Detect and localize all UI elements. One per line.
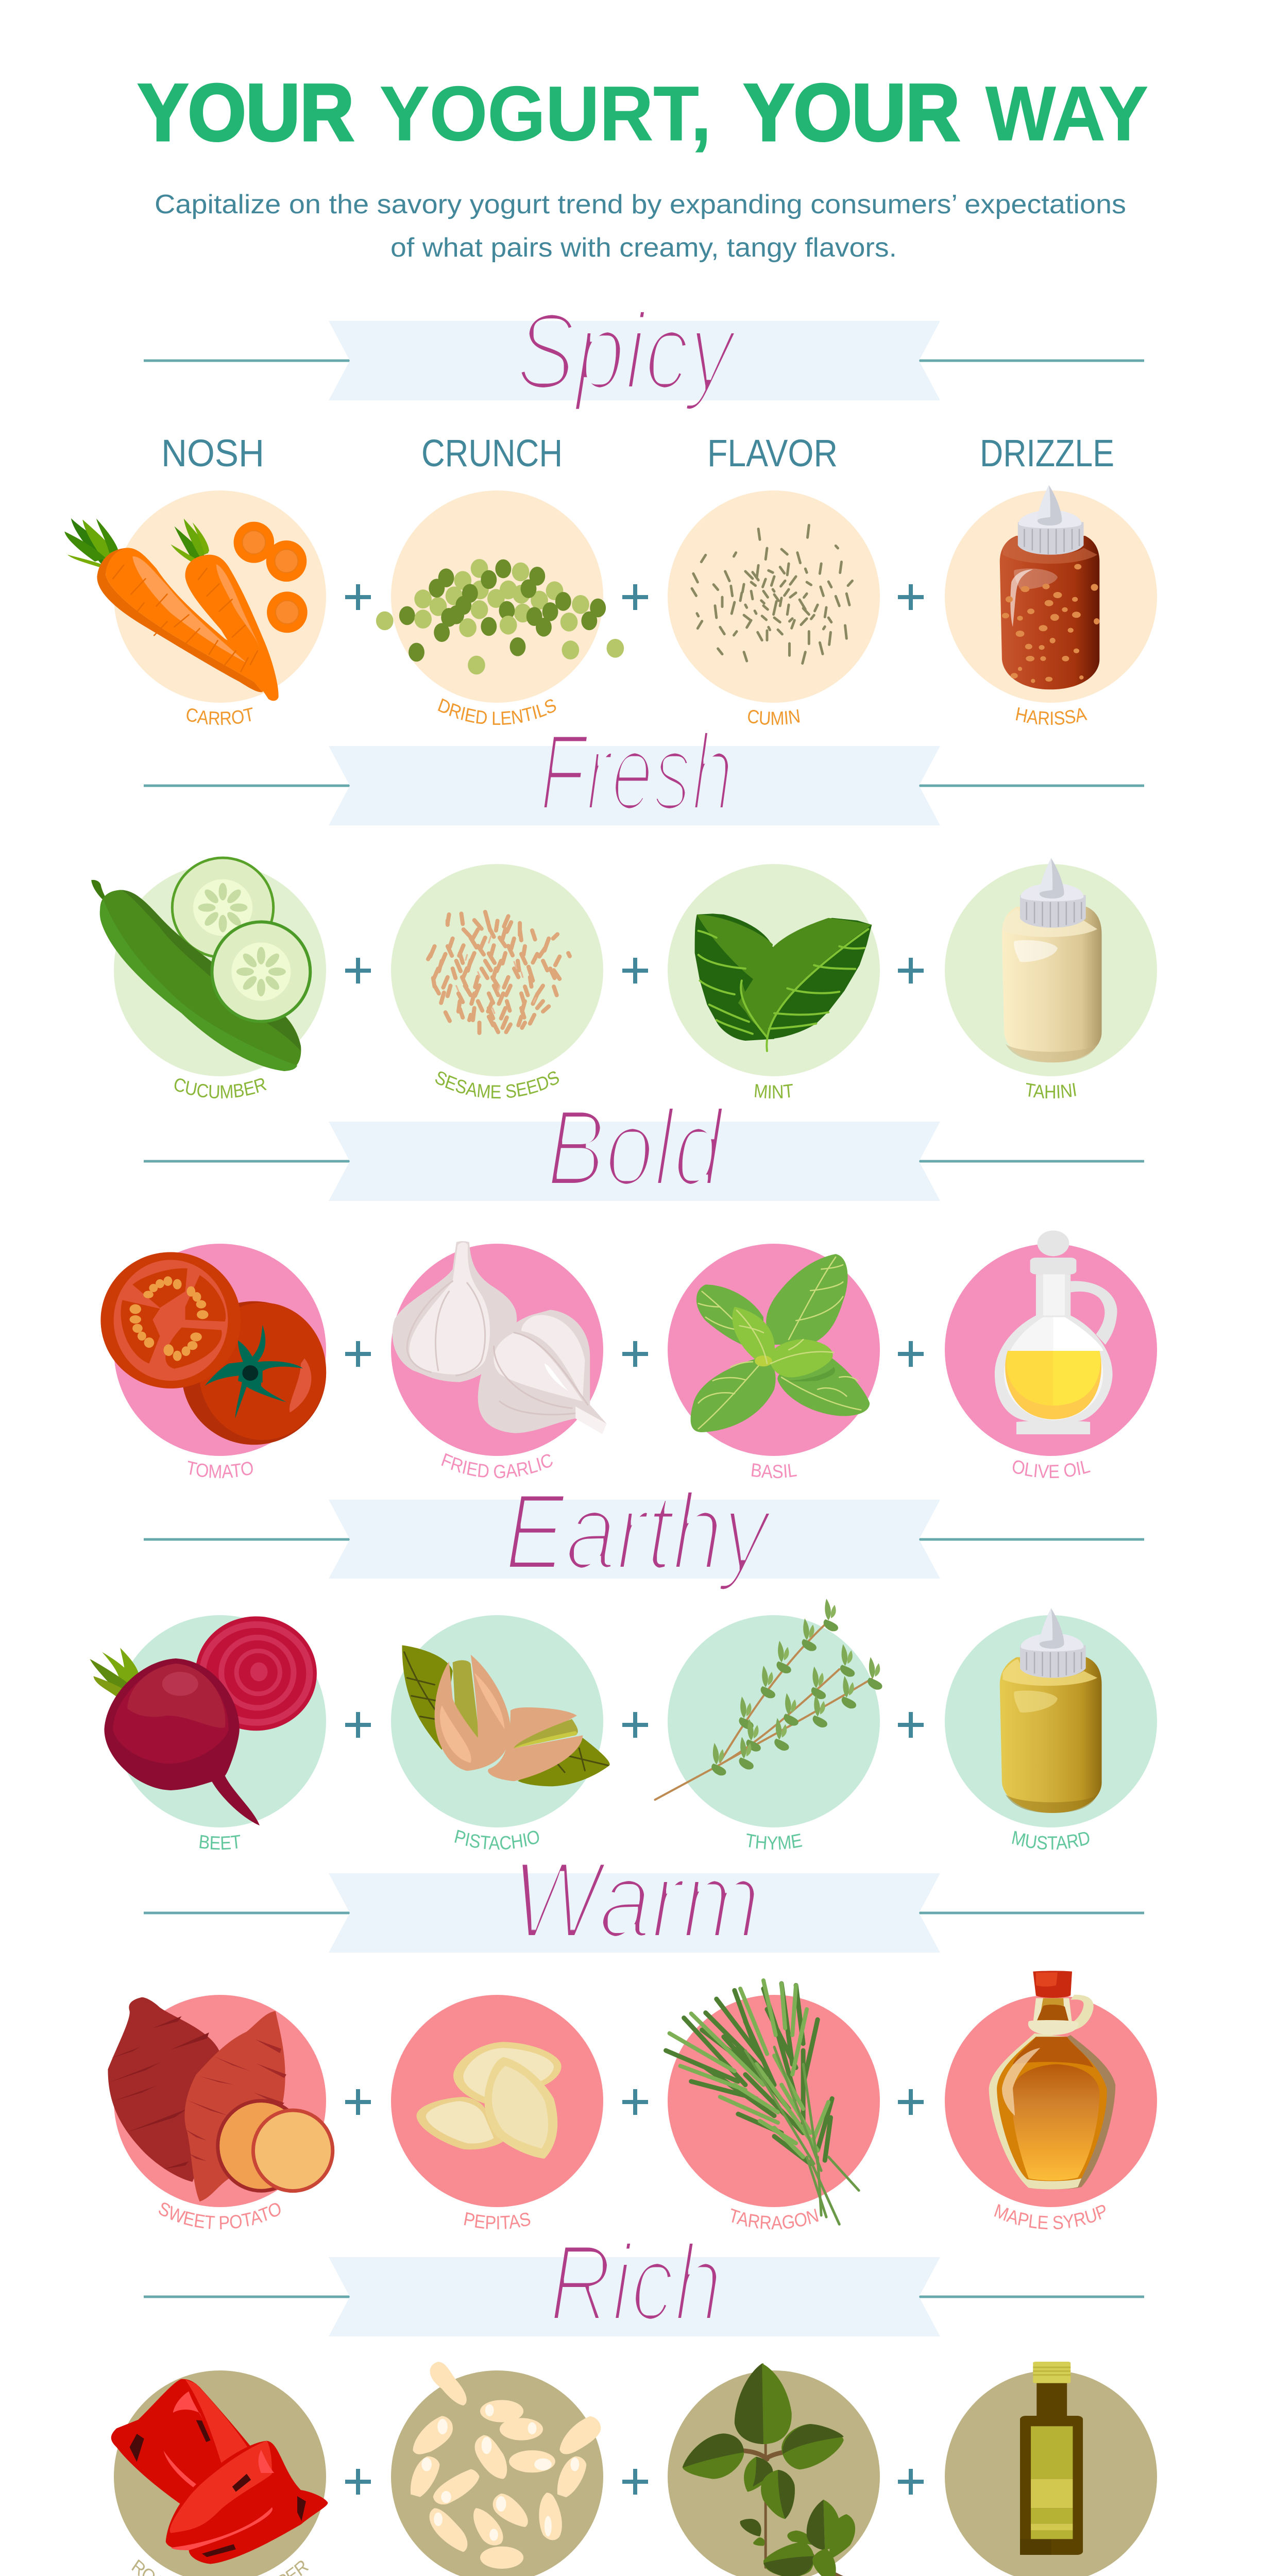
- icon: tarragon: [666, 1980, 859, 2224]
- item: pepitas: [391, 1995, 603, 2234]
- icon: mint leaves: [695, 913, 872, 1051]
- item: beet: [90, 1615, 326, 1854]
- label: sweet potato: SWEET POTATO: [159, 2202, 280, 2230]
- title: YOGURT,: [380, 70, 711, 157]
- item: mint: [668, 864, 880, 1103]
- label: dried lentils: DRIED LENTILS: [438, 699, 556, 725]
- heading: Rich: Rich: [549, 2222, 722, 2343]
- column headings: CRUNCH: [421, 432, 563, 474]
- section: Fresh: [91, 711, 1157, 1103]
- title: [138, 68, 1148, 158]
- heading: Warm: Warm: [512, 1839, 760, 1960]
- item: fried garlic: [391, 1241, 607, 1483]
- icon: truffle oil bottle: [1020, 2362, 1083, 2555]
- icon: basil: [691, 1254, 870, 1432]
- icon: beet: [90, 1616, 317, 1825]
- icon: thyme: [655, 1599, 882, 1800]
- line: left and right rules: [144, 784, 1144, 787]
- section: Bold: [100, 1087, 1157, 1483]
- item: roasted red pepper: [111, 2370, 328, 2576]
- label: pistachio: PISTACHIO: [454, 1830, 539, 1850]
- icon: tahini bottle: [1002, 858, 1102, 1062]
- icon: sesame seeds: [428, 912, 570, 1033]
- column headings: NOSH: [161, 432, 264, 474]
- banner: [329, 321, 940, 400]
- plus signs: [345, 2089, 924, 2115]
- label: tomato: TOMATO: [188, 1461, 253, 1479]
- item: thyme: [655, 1599, 882, 1854]
- column headings: DRIZZLE: [980, 432, 1114, 474]
- icon: maple syrup bottle: [989, 1971, 1115, 2189]
- label: carrot: CARROT: [186, 707, 252, 725]
- icon: pepitas: [417, 2042, 562, 2159]
- heading: Fresh: Fresh: [539, 711, 734, 833]
- label: mustard: MUSTARD: [1012, 1831, 1089, 1850]
- item: tarragon: [666, 1980, 880, 2234]
- icon: sweet potato: [108, 1997, 333, 2201]
- plus signs: [345, 958, 924, 984]
- label: thyme: THYME: [746, 1833, 803, 1850]
- label: pepitas: PEPITAS: [462, 2208, 532, 2234]
- icon: dried lentils: [376, 559, 624, 674]
- heading: Earthy: Earthy: [504, 1471, 773, 1592]
- section: Earthy: [90, 1471, 1157, 1854]
- icon: carrot: [64, 518, 308, 701]
- item: tomato: [100, 1244, 326, 1483]
- subtitle: [155, 190, 1126, 263]
- banner: [329, 1122, 940, 1201]
- item: pine nuts: [391, 2362, 603, 2576]
- title: YOUR: [744, 68, 960, 158]
- icon: tomato: [100, 1252, 326, 1445]
- item: sesame seeds: [391, 864, 603, 1103]
- item: cumin: [668, 490, 880, 730]
- banner: [329, 2257, 940, 2336]
- plus signs: [345, 1341, 924, 1367]
- item: dried lentils: [376, 490, 624, 730]
- item: olive oil: [945, 1230, 1157, 1483]
- icon: garlic: [393, 1241, 607, 1434]
- label: tahini: TAHINI: [1026, 1083, 1076, 1098]
- line: left and right rules: [144, 360, 1144, 362]
- item: harissa: [945, 485, 1157, 730]
- label: beet: BEET: [199, 1835, 240, 1850]
- line: left and right rules: [144, 1538, 1144, 1540]
- label: mint: MINT: [755, 1084, 793, 1098]
- label: maple syrup: MAPLE SYRUP: [992, 2200, 1110, 2234]
- label: sesame seeds: SESAME SEEDS: [435, 1072, 559, 1098]
- label: cucumber: CUCUMBER: [174, 1078, 267, 1098]
- line: left and right rules: [144, 2296, 1144, 2298]
- item: sweet potato: [108, 1995, 333, 2234]
- section: Rich: [111, 2222, 1157, 2576]
- label: cumin: CUMIN: [748, 709, 800, 725]
- item: carrot: [64, 490, 326, 730]
- icon: pistachio: [402, 1645, 610, 1786]
- subtitle: Capitalize on the savory yogurt trend by expanding consumers’ expectations: [155, 190, 1126, 219]
- section: Spicy: [64, 291, 1157, 730]
- label: olive oil: OLIVE OIL: [1013, 1460, 1091, 1478]
- plus signs: [345, 2469, 924, 2495]
- line: left and right rules: [144, 1911, 1144, 1914]
- item: mustard: [945, 1608, 1157, 1854]
- icon: cucumber: [91, 858, 310, 1071]
- line: left and right rules: [144, 1160, 1144, 1162]
- item: cucumber: [91, 858, 326, 1103]
- banner: [329, 746, 940, 825]
- label: basil: BASIL: [751, 1463, 797, 1479]
- plus signs: [345, 584, 924, 610]
- item: maple syrup: [945, 1971, 1157, 2234]
- icon: olive oil cruet: [995, 1230, 1117, 1434]
- banner: [329, 1500, 940, 1579]
- icon: harissa bottle: [1000, 485, 1099, 689]
- icon: mustard bottle: [1000, 1608, 1102, 1813]
- icon: pine nuts: [411, 2362, 601, 2569]
- item: basil: [668, 1244, 880, 1483]
- column headings: [161, 432, 1114, 474]
- banner: [329, 1873, 940, 1953]
- icon: roasted red pepper: [111, 2379, 328, 2564]
- icon: cumin: [692, 525, 853, 664]
- column headings: FLAVOR: [707, 432, 838, 474]
- subtitle: of what pairs with creamy, tangy flavors.: [390, 233, 897, 263]
- label: harissa: HARISSA: [1016, 707, 1087, 725]
- icon: oregano: [683, 2363, 858, 2576]
- heading: Bold: Bold: [547, 1087, 725, 1208]
- heading: Spicy: Spicy: [516, 291, 738, 412]
- label: fried garlic: FRIED GARLIC: [441, 1453, 553, 1479]
- title: WAY: [985, 70, 1148, 157]
- item: pistachio: [391, 1615, 610, 1854]
- section: Warm: [108, 1839, 1157, 2234]
- item: oregano: [668, 2363, 880, 2576]
- item: truffle oil: [945, 2362, 1157, 2576]
- label: tarragon: TARRAGON: [726, 2205, 821, 2234]
- plus signs: [345, 1712, 924, 1738]
- item: tahini: [945, 858, 1157, 1103]
- title: YOUR: [138, 68, 354, 158]
